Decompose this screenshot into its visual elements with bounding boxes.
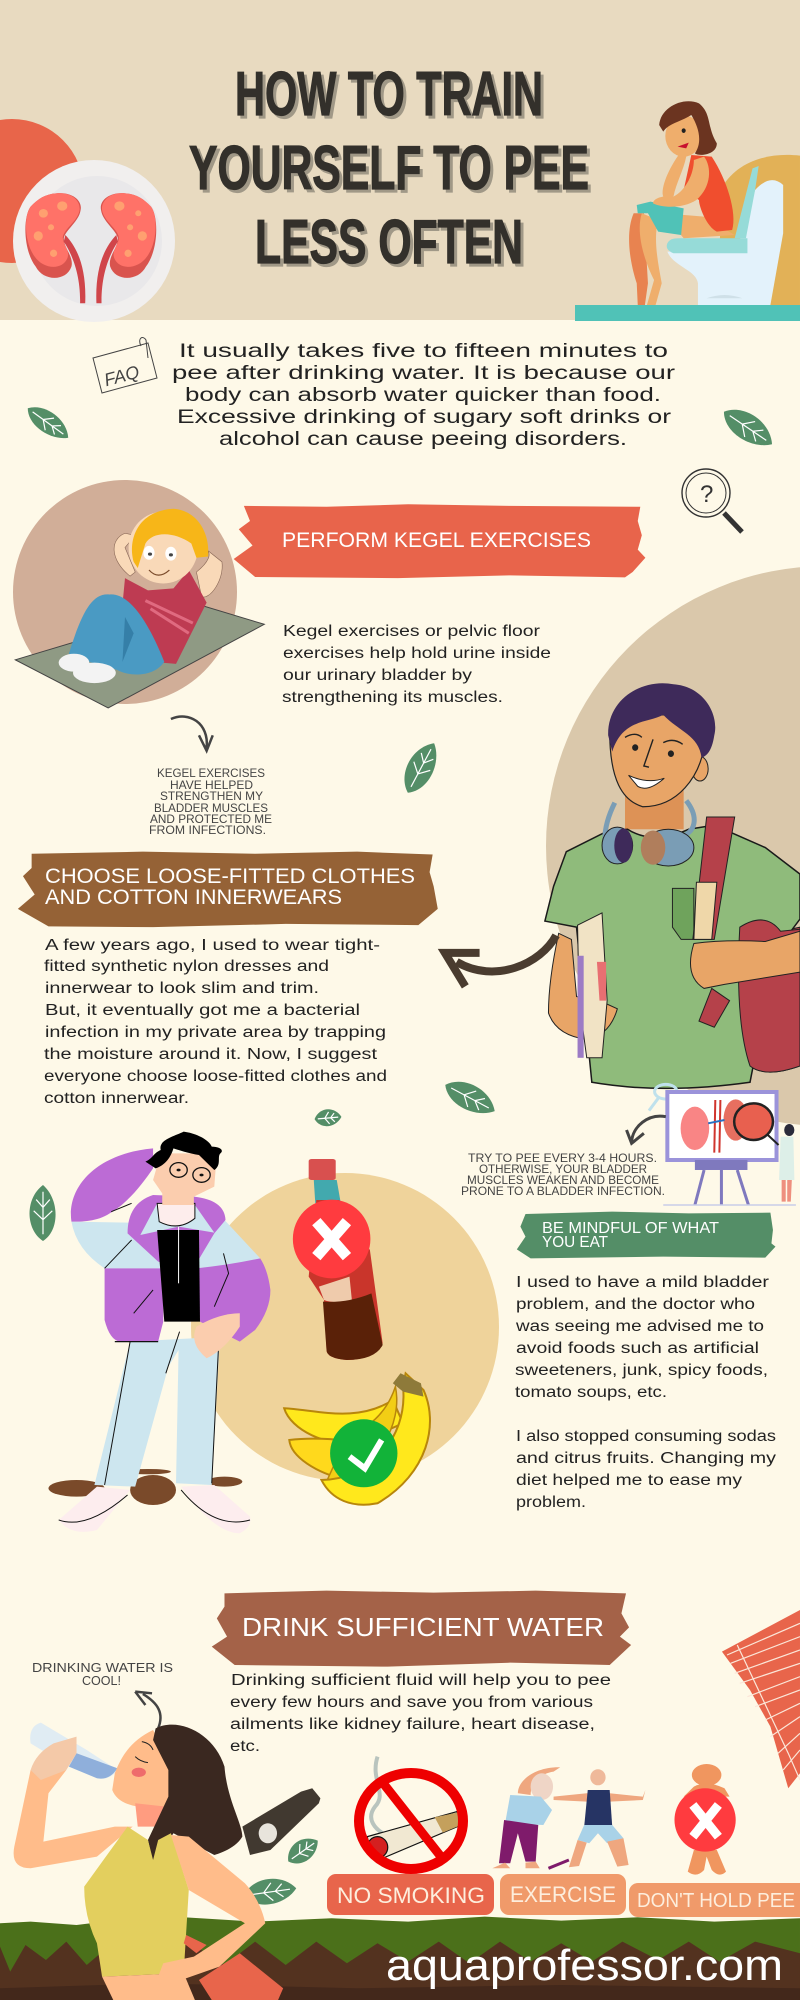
icon: small leaf bbox=[314, 1108, 342, 1127]
water caption: DRINKING WATER IS bbox=[32, 1661, 173, 1675]
pee caption: PRONE TO A BLADDER INFECTION. bbox=[461, 1184, 665, 1198]
intro text: alcohol can cause peeing disorders. bbox=[219, 429, 627, 450]
label: exercise: EXERCISE bbox=[510, 1882, 616, 1907]
title: YOURSELF TO PEE bbox=[192, 137, 592, 206]
banner: be mindful: YOU EAT bbox=[542, 1234, 608, 1251]
clothes text: fitted synthetic nylon dresses and bbox=[44, 958, 329, 975]
mindful text: diet helped me to ease my bbox=[516, 1472, 742, 1489]
banner: choose loose-fitted clothes bbox=[18, 852, 438, 927]
arrow: chart to caption bbox=[627, 1116, 666, 1143]
mindful text bbox=[515, 1274, 776, 1511]
arrow: curved down bbox=[171, 716, 213, 751]
ground with grass bbox=[0, 1917, 800, 2000]
mindful text: sweeteners, junk, spicy foods, bbox=[515, 1362, 768, 1379]
mindful text: problem. bbox=[516, 1494, 586, 1511]
icon: FAQ note: FAQ bbox=[102, 362, 142, 390]
arrow: from boy to clothes section bbox=[445, 935, 556, 986]
arrow: up to caption bbox=[135, 1692, 161, 1728]
background circle behind boy bbox=[546, 566, 800, 1126]
icon: kidneys on a plate bbox=[13, 160, 175, 322]
panel: drink sufficient water bbox=[0, 1591, 800, 2000]
intro text: It usually takes five to fifteen minutes to bbox=[179, 341, 668, 362]
water text bbox=[230, 1672, 611, 1755]
icon: FAQ note bbox=[93, 338, 157, 393]
water text: every few hours and save you from various bbox=[230, 1694, 593, 1711]
icon: dark bottle bbox=[242, 1788, 320, 1855]
title: HOW TO TRAIN bbox=[238, 63, 546, 132]
panel: kegel exercises bbox=[13, 480, 645, 837]
clothes text: everyone choose loose-fitted clothes and bbox=[44, 1068, 387, 1085]
kegel text bbox=[282, 623, 551, 706]
intro text bbox=[172, 341, 676, 450]
label: no smoking: NO SMOKING bbox=[337, 1883, 485, 1908]
intro text: pee after drinking water. It is because our bbox=[172, 363, 676, 384]
clothes text: innerwear to look slim and trim. bbox=[45, 980, 319, 997]
banner: perform kegel exercises bbox=[234, 504, 645, 578]
pee caption: TRY TO PEE EVERY 3-4 HOURS. bbox=[468, 1151, 657, 1165]
banner: be mindful bbox=[517, 1212, 776, 1258]
pee caption: MUSCLES WEAKEN AND BECOME bbox=[467, 1173, 659, 1187]
illustration: soda bottle with red cross bbox=[293, 1159, 383, 1360]
mindful text: and citrus fruits. Changing my bbox=[516, 1450, 776, 1467]
icon: magnifier question: ? bbox=[700, 481, 713, 508]
water caption: COOL! bbox=[82, 1674, 121, 1688]
panel: intro bbox=[22, 338, 780, 532]
icon: no smoking bbox=[359, 1757, 465, 1869]
icon: leaf bbox=[282, 1832, 324, 1870]
pee caption bbox=[461, 1151, 665, 1198]
label: dont hold pee: DON'T HOLD PEE bbox=[637, 1890, 795, 1912]
kegel caption: STRENGTHEN MY bbox=[160, 789, 263, 803]
mindful text: I used to have a mild bladder bbox=[516, 1274, 769, 1291]
panel: loose-fitted clothes bbox=[18, 852, 501, 1241]
kegel caption bbox=[149, 766, 272, 837]
mindful text: tomato soups, etc. bbox=[515, 1384, 667, 1401]
pee caption: OTHERWISE, YOUR BLADDER bbox=[479, 1162, 647, 1176]
banner: choose loose-fitted clothes: CHOOSE LOOSE-FITTED CLOTHES bbox=[45, 865, 415, 888]
banner: choose loose-fitted clothes: AND COTTON INNERWEARS bbox=[45, 886, 342, 909]
mindful text: I also stopped consuming sodas bbox=[516, 1428, 776, 1445]
intro text: Excessive drinking of sugary soft drinks or bbox=[177, 407, 672, 428]
decoration: torn red paper bbox=[722, 1610, 800, 1788]
water text: ailments like kidney failure, heart disease, bbox=[230, 1716, 595, 1733]
mindful text: avoid foods such as artificial bbox=[516, 1340, 759, 1357]
clothes text: But, it eventually got me a bacterial bbox=[45, 1002, 360, 1019]
icon: leaf bbox=[440, 1073, 501, 1122]
kegel caption: AND PROTECTED ME bbox=[150, 812, 272, 826]
clothes text: the moisture around it. Now, I suggest bbox=[44, 1046, 378, 1063]
kegel text: Kegel exercises or pelvic floor bbox=[283, 623, 540, 640]
illustration: two people exercising bbox=[492, 1767, 645, 1868]
icon: dont hold pee figure bbox=[674, 1764, 736, 1875]
teal floor bbox=[575, 305, 800, 321]
label: dont hold pee bbox=[629, 1883, 800, 1917]
kegel caption: HAVE HELPED bbox=[170, 778, 253, 792]
footer website: aquaprofessor.com bbox=[386, 1941, 783, 1990]
kegel caption: BLADDER MUSCLES bbox=[154, 801, 268, 815]
water text: etc. bbox=[230, 1738, 260, 1755]
clothes text: infection in my private area by trapping bbox=[45, 1024, 386, 1041]
illustration: banana with green check bbox=[284, 1373, 430, 1505]
icon: leaf vertical bbox=[30, 1185, 56, 1241]
illustration: woman drinking water bbox=[14, 1723, 283, 2000]
clothes text: cotton innerwear. bbox=[44, 1090, 189, 1107]
clothes text bbox=[44, 937, 387, 1107]
title bbox=[189, 60, 592, 280]
water caption bbox=[32, 1661, 173, 1688]
kegel text: strengthening its muscles. bbox=[282, 689, 503, 706]
title: LESS OFTEN bbox=[258, 211, 526, 280]
icon: leaf right bbox=[717, 401, 780, 455]
title: LESS OFTEN bbox=[255, 208, 523, 277]
label: no smoking bbox=[327, 1874, 494, 1915]
kegel caption: FROM INFECTIONS. bbox=[149, 823, 266, 837]
banner: perform kegel exercises: PERFORM KEGEL EXERCISES bbox=[282, 528, 591, 552]
intro text: body can absorb water quicker than food. bbox=[185, 385, 661, 406]
illustration: kid doing sit-ups bbox=[13, 480, 264, 708]
illustration: doctor with kidney chart bbox=[649, 1084, 796, 1205]
banner: drink sufficient water bbox=[212, 1591, 631, 1667]
title: HOW TO TRAIN bbox=[235, 60, 543, 129]
panel: header band bbox=[0, 0, 800, 322]
icon: leaf bbox=[396, 737, 445, 799]
label: exercise bbox=[500, 1874, 626, 1915]
illustration: boy with backpack bbox=[545, 683, 800, 1088]
kegel text: our urinary bladder by bbox=[283, 667, 472, 684]
background circle behind foods bbox=[191, 1173, 499, 1481]
mindful text: problem, and the doctor who bbox=[516, 1296, 755, 1313]
mindful text: was seeing me advised me to bbox=[515, 1318, 764, 1335]
clothes text: A few years ago, I used to wear tight- bbox=[45, 937, 380, 954]
icon: leaf bbox=[242, 1875, 298, 1908]
icon: magnifier question bbox=[682, 469, 742, 532]
banner: be mindful: BE MINDFUL OF WHAT bbox=[542, 1220, 719, 1237]
illustration: woman on toilet bbox=[629, 101, 800, 305]
illustration: person with glasses bbox=[48, 1132, 270, 1533]
banner: drink sufficient water: DRINK SUFFICIENT WATER bbox=[242, 1614, 604, 1642]
kegel caption: KEGEL EXERCISES bbox=[157, 766, 265, 780]
title: YOURSELF TO PEE bbox=[189, 134, 589, 203]
icon: leaf left bbox=[22, 400, 75, 446]
orange background circle bbox=[0, 119, 84, 263]
kegel text: exercises help hold urine inside bbox=[283, 645, 551, 662]
panel: be mindful of what you eat bbox=[48, 1084, 796, 1533]
water text: Drinking sufficient fluid will help you to pee bbox=[231, 1672, 611, 1689]
